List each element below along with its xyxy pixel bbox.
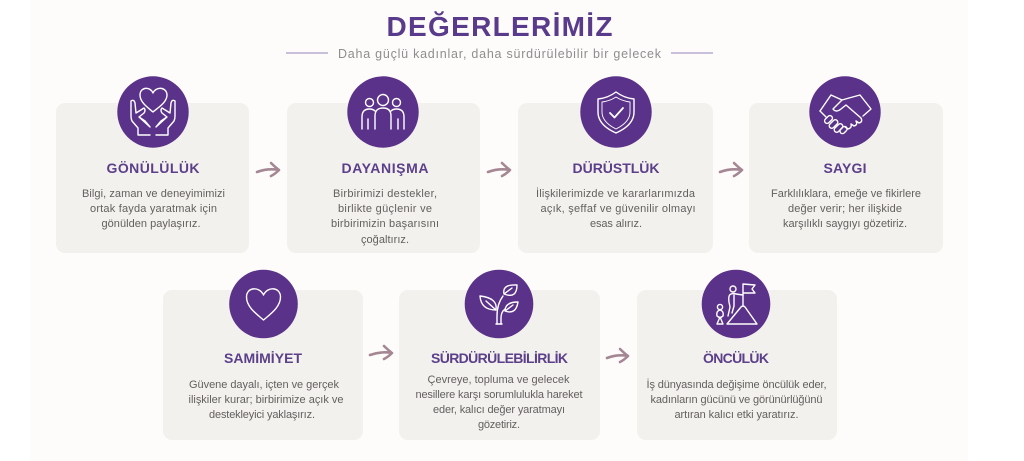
panel: Samimiyet: Güvene dayalı, içten ve gerçek [189,379,340,391]
panel: Samimiyet: SAMİMİYET [224,350,302,366]
icon: heart [246,289,280,320]
icon: handshake [820,95,871,135]
panel: Öncülük: kadınların gücünü ve görünürlüğünü [650,394,822,406]
panel: Samimiyet: destekleyici yaklaşırız. [209,409,315,421]
panel: Dayanışma: birlikte güçlenir ve [338,203,432,215]
arrow 5 [607,349,628,362]
panel: Dürüstlük: İlişkilerimizde ve kararlarımızda [536,187,696,200]
icon: plant [480,285,518,324]
panel: Sürdürülebilirlik: gözetiriz. [478,419,520,431]
panel: Dürüstlük: DÜRÜSTLÜK [572,160,660,176]
panel: Dürüstlük: esas alırız. [590,218,642,230]
panel: Dürüstlük: açık, şeffaf ve güvenilir olmayı [540,203,696,215]
panel: Gönüllülük [56,76,249,253]
panel: Dürüstlük [518,76,713,253]
arrow 4 [370,346,392,359]
panel: Saygı [749,76,943,253]
panel: Öncülük: ÖNCÜLÜK [703,350,769,366]
panel: Öncülük: artıran kalıcı etki yaratırız. [674,409,798,421]
arrow 2 [488,163,510,176]
panel: Gönüllülük: GÖNÜLÜLÜK [106,160,200,176]
panel: Samimiyet [163,270,363,440]
panel: Saygı: SAYGI [824,160,866,176]
panel: Sürdürülebilirlik [399,270,600,440]
panel: Dayanışma: Birbirimizi destekler, [333,188,437,200]
panel: Sürdürülebilirlik: nesillere karşı sorumlulukla hareket [416,389,582,401]
panel: Öncülük [637,270,837,440]
icon: hands holding heart [131,88,175,135]
panel: Samimiyet: ilişkiler kurar; birbirimize açık ve [188,394,344,406]
panel: Saygı: değer verir; her ilişkide [788,203,902,215]
panel: Dayanışma [287,76,480,253]
title: DEĞERLERİMİZ [386,11,612,42]
icon: mountain with flag [717,284,757,324]
panel: Sürdürülebilirlik: SÜRDÜRÜLEBİLİRLİK [431,350,568,366]
icon: shield with check [598,92,634,133]
panel: Dayanışma: DAYANIŞMA [342,160,428,176]
panel: Sürdürülebilirlik: eder, kalıcı değer yaratmayı [433,404,565,416]
panel: Saygı: Farklılıklara, emeğe ve fikirlere [771,188,921,200]
icon: people [362,94,404,129]
panel: Gönüllülük: Bilgi, zaman ve deneyimimizi [82,188,225,200]
panel: Saygı: karşılıklı saygıyı gözetiriz. [783,218,907,230]
arrow 1 [257,163,279,176]
panel: Sürdürülebilirlik: Çevreye, topluma ve gelecek [428,374,570,386]
panel: Öncülük: İş dünyasında değişime öncülük eder, [646,378,826,391]
panel: Dayanışma: çoğaltırız. [361,234,409,246]
subtitle: Daha güçlü kadınlar, daha sürdürülebilir bir gelecek [338,47,662,61]
panel: Dayanışma: birbirimizin başarısını [331,218,439,230]
panel: Gönüllülük: gönülden paylaşırız. [102,218,200,230]
arrow 3 [720,163,742,176]
panel: Gönüllülük: ortak fayda yaratmak için [90,203,217,215]
